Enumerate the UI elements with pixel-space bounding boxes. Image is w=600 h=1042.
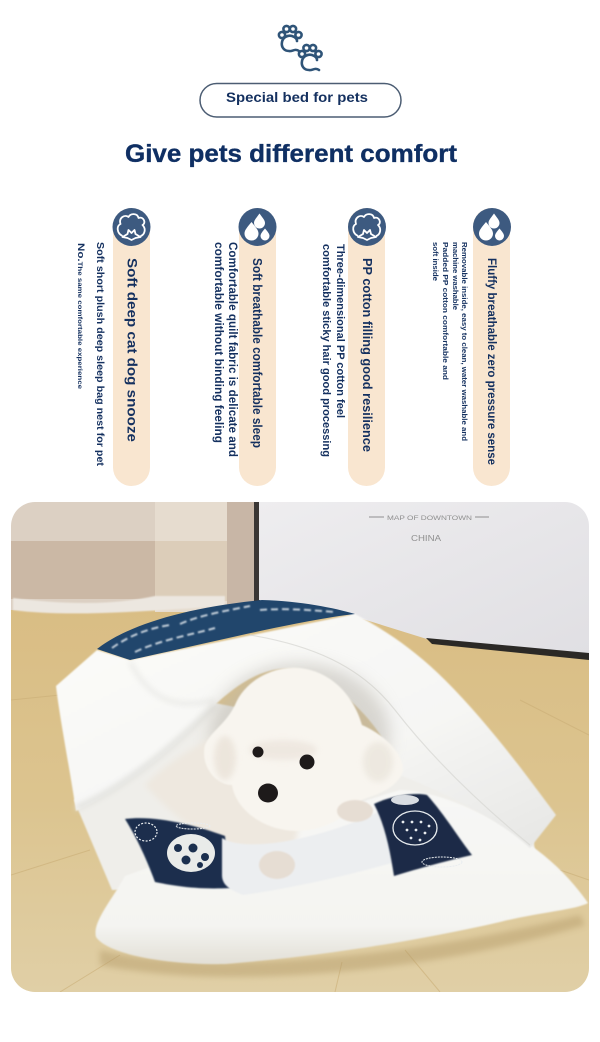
heading 1: Soft deep cat dog snooze xyxy=(124,258,140,442)
panel: feature 4 fluffy breathable xyxy=(431,208,511,486)
icon: cotton boll 1 xyxy=(112,208,150,246)
badge: special bed for pets: Special bed for pets xyxy=(226,89,368,105)
panel: feature 1 soft deep snooze xyxy=(75,208,150,486)
title: Give pets different comfort xyxy=(125,140,458,168)
description 4: soft inside xyxy=(431,242,438,281)
icon: water drops 4 xyxy=(473,208,511,246)
description 3 xyxy=(320,244,346,457)
pillow xyxy=(125,794,472,895)
pillow prints xyxy=(135,795,462,872)
floor xyxy=(11,606,589,992)
poster caption xyxy=(369,515,489,543)
pillow white middle xyxy=(222,812,395,895)
photo: white dog in sleeping bag bed xyxy=(11,502,589,992)
poster caption: CHINA xyxy=(411,534,442,543)
description 4 xyxy=(431,242,467,441)
pillow right navy end xyxy=(374,794,472,876)
description 4: Removable inside, easy to clean, water washable and xyxy=(460,242,467,441)
description 2 xyxy=(212,242,238,457)
poster frame xyxy=(254,502,589,660)
sleeping bag top flap xyxy=(56,614,556,848)
badge: special bed for pets xyxy=(200,84,401,117)
panel: feature 2 soft breathable xyxy=(212,208,276,486)
navy printed band xyxy=(97,600,355,660)
pill 2 xyxy=(239,208,276,486)
curtain wall xyxy=(11,502,256,613)
shadow around head xyxy=(206,658,395,746)
pill 1 xyxy=(113,208,150,486)
icon: paw prints xyxy=(279,26,322,70)
icon: cotton boll 3 xyxy=(348,208,386,246)
heading 2: Soft breathable comfortable sleep xyxy=(250,258,264,448)
dog eyes and nose xyxy=(252,746,314,802)
poster caption: MAP OF DOWNTOWN xyxy=(387,515,472,522)
panel: feature 3 PP cotton xyxy=(320,208,386,486)
pill 3 xyxy=(348,208,385,486)
floor shadow under bed xyxy=(100,915,585,977)
pillow left navy end xyxy=(125,818,230,888)
description 4: machine washable xyxy=(451,242,458,310)
description 2: comfortable without binding feeling xyxy=(212,242,224,443)
description 2: Comfortable quilt fabric is delicate and xyxy=(226,242,238,457)
dog paws xyxy=(259,800,373,879)
dog body xyxy=(150,748,298,844)
description 3: Three-dimensional PP cotton feel xyxy=(334,244,346,418)
description 3: comfortable sticky hair good processing xyxy=(320,244,332,457)
description 4: Padded PP cotton comfortable and xyxy=(441,242,448,380)
heading 3: PP cotton filling good resilience xyxy=(360,258,374,452)
note 1: No. The same comfortable experience xyxy=(75,243,86,389)
heading 4: Fluffy breathable zero pressure sense xyxy=(485,258,499,465)
icon: water drops 2 xyxy=(238,208,276,246)
pill 4 xyxy=(473,208,510,486)
sleeping bag back and interior xyxy=(74,700,540,890)
dog head xyxy=(204,668,403,831)
description 1: Soft short plush deep sleep bag nest for pet xyxy=(94,242,106,467)
bottom cushion xyxy=(95,790,588,964)
